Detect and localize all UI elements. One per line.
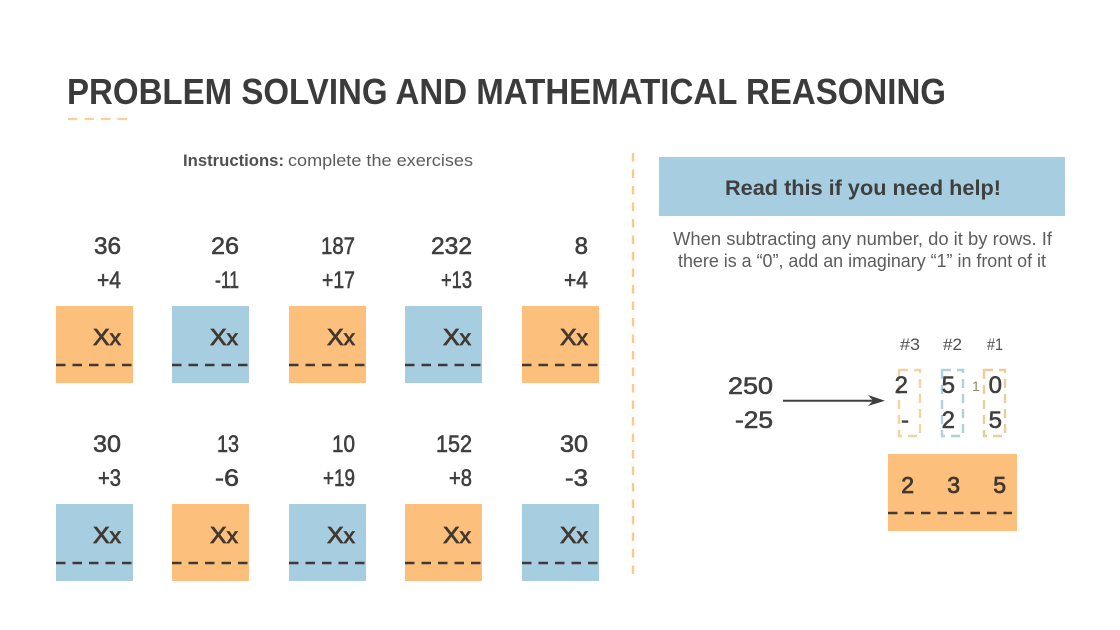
exercise 232 +13: Xx [443,324,472,350]
exercise 10 +19: +19 [323,465,355,492]
exercise grid [56,233,599,581]
exercise 10 +19: Xx [327,522,356,548]
exercise 232 +13 [405,233,482,383]
column digits: 5 [942,372,955,399]
exercise 187 +17: 187 [321,233,355,260]
dashed column boxes [899,370,1005,436]
column labels [900,335,1003,354]
column digits: 0 [989,372,1002,399]
exercise 152 +8: Xx [443,522,472,548]
column digits: 2 [895,372,908,399]
column digits: - [901,407,909,434]
exercise 8 +4: 8 [575,233,588,260]
answer box: 3 [947,472,960,498]
exercise 13 -6 [172,431,249,581]
exercise 8 +4: +4 [564,267,588,294]
column digits [895,372,1002,434]
help text: When subtracting any number, do it by rows. If [673,229,1053,249]
exercise 152 +8 [405,431,482,581]
title underline [68,118,127,120]
exercise 13 -6: -6 [215,465,239,492]
exercise 30 -3: 30 [560,431,588,458]
instructions: Instructions: [183,151,284,170]
exercise 152 +8: +8 [449,465,472,492]
exercise 36 +4: Xx [93,324,122,350]
exercise 187 +17: +17 [322,267,355,294]
instructions: complete the exercises [288,151,473,170]
exercise 13 -6: Xx [210,522,239,548]
answer box: 5 [993,472,1006,498]
help text [673,229,1053,271]
exercise 232 +13: +13 [441,267,472,294]
exercise 26 -11 [172,233,249,383]
exercise 30 +3: 30 [93,431,121,458]
exercise 30 +3: +3 [98,465,121,492]
column digits: 2 [942,407,955,434]
exercise 26 -11: -11 [215,267,239,294]
exercise 30 -3: -3 [565,465,588,492]
exercise 232 +13: 232 [431,233,472,260]
column labels: #2 [943,335,962,354]
help banner [659,157,1065,216]
column digits: 5 [989,407,1002,434]
exercise 8 +4: Xx [560,324,589,350]
exercise 187 +17 [289,233,366,383]
exercise 152 +8: 152 [436,431,472,458]
exercise 30 -3: Xx [560,522,589,548]
exercise 10 +19 [289,431,366,581]
exercise 26 -11: Xx [210,324,239,350]
exercise 36 +4: 36 [94,233,121,260]
exercise 30 +3: Xx [93,522,122,548]
original sum: -25 [735,407,773,434]
worked example [728,335,1017,531]
exercise 30 -3 [522,431,599,581]
exercise 8 +4 [522,233,599,383]
column divider [632,153,634,581]
answer box: 2 [901,472,914,498]
exercise 26 -11: 26 [211,233,239,260]
arrow [783,395,885,406]
exercise 13 -6: 13 [217,431,239,458]
instructions [183,151,473,170]
help text: there is a “0”, add an imaginary “1” in front of it [678,251,1046,271]
exercise 30 +3 [56,431,133,581]
exercise 36 +4: +4 [97,267,121,294]
help banner: Read this if you need help! [725,177,1001,200]
column labels: #1 [987,335,1003,354]
exercise 36 +4 [56,233,133,383]
title: PROBLEM SOLVING AND MATHEMATICAL REASONING [67,71,946,112]
column digits: 1 [972,378,980,394]
column labels: #3 [900,335,920,354]
exercise 187 +17: Xx [327,324,356,350]
original sum [728,373,773,434]
original sum: 250 [728,373,773,400]
exercise 10 +19: 10 [332,431,355,458]
answer box [888,454,1017,531]
